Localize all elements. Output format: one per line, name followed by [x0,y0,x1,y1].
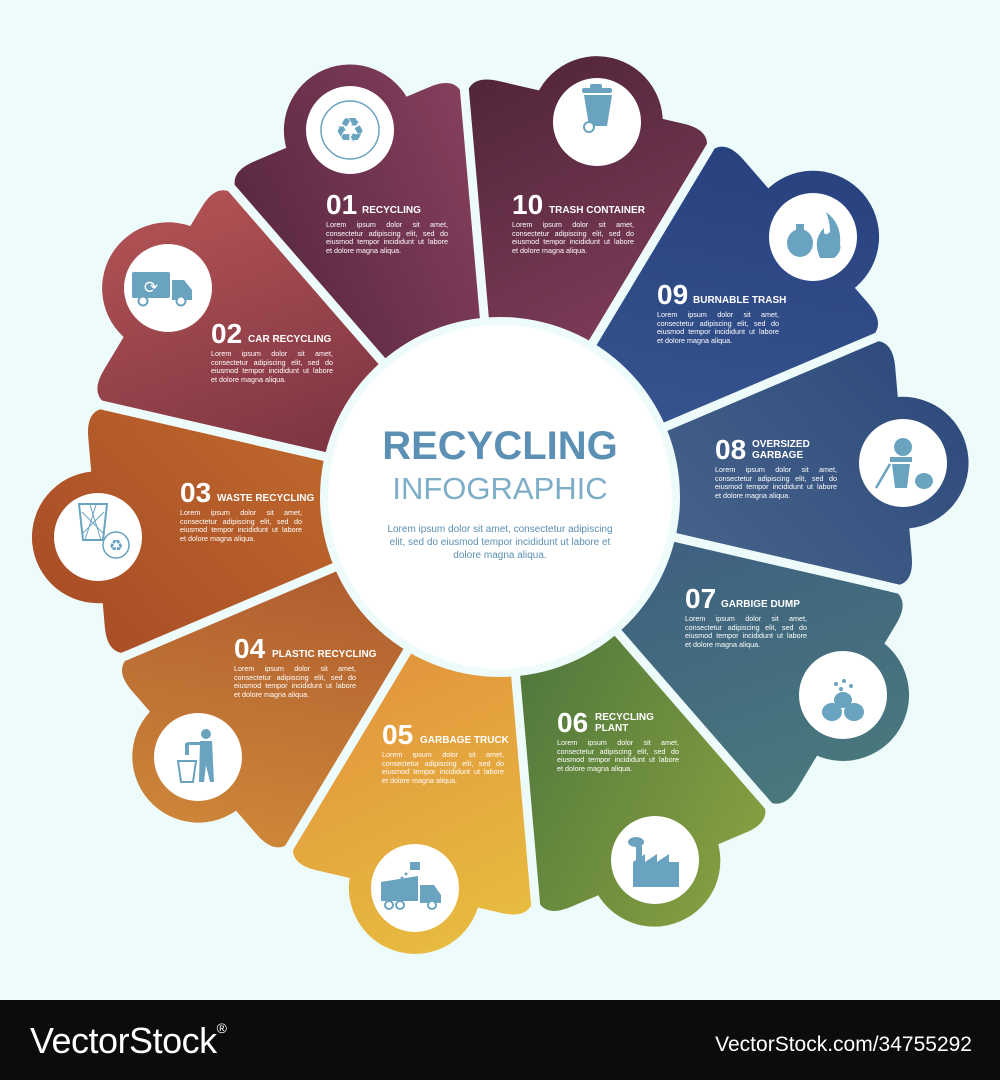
petal 02 [44,156,563,602]
text 04: 04 [234,633,265,664]
text 09: 09 [657,279,688,310]
text 01: consectetur adipiscing elit, sed do [326,229,448,238]
text 04: eiusmod tempor incididunt ut labore [234,681,356,690]
text 07: et dolore magna aliqua. [685,640,760,649]
text 06: Lorem ipsum dolor sit amet, [557,738,679,747]
text 08: et dolore magna aliqua. [715,491,790,500]
petal 08 [489,334,979,619]
text 09 [657,279,786,345]
text 08: Lorem ipsum dolor sit amet, [715,465,837,474]
footer watermark bar [0,1000,1000,1080]
text 03: consectetur adipiscing elit, sed do [180,517,302,526]
text 04 [234,633,376,699]
text 08: OVERSIZED [752,439,810,450]
petal 06 [387,449,793,969]
text 08: 08 [715,434,746,465]
icon 07: garbage dump [799,651,887,739]
text 04: PLASTIC RECYCLING [272,649,376,660]
text 03: eiusmod tempor incididunt ut labore [180,525,302,534]
text 10: 10 [512,189,543,220]
text 02: CAR RECYCLING [248,334,331,345]
text 07 [685,583,807,649]
footer watermark bar: VectorStock.com/34755292 [715,1033,972,1056]
text 10: et dolore magna aliqua. [512,246,587,255]
text 02: eiusmod tempor incididunt ut labore [211,366,333,375]
text 04: consectetur adipiscing elit, sed do [234,673,356,682]
text 01: 01 [326,189,357,220]
text 05: consectetur adipiscing elit, sed do [382,759,504,768]
text 10 [512,189,645,255]
petal 04 [69,404,581,894]
icon 10: trash container [553,78,641,166]
text 07: Lorem ipsum dolor sit amet, [685,614,807,623]
petal 03 [21,375,511,660]
text 04: Lorem ipsum dolor sit amet, [234,664,356,673]
text 05: 05 [382,719,413,750]
text 09: et dolore magna aliqua. [657,336,732,345]
center title: INFOGRAPHIC [392,471,608,506]
text 09: BURNABLE TRASH [693,295,786,306]
petal 05 [275,469,620,979]
text 05 [382,719,509,785]
text 06: eiusmod tempor incididunt ut labore [557,755,679,764]
text 06 [557,707,679,773]
icon 03: waste recycling [54,493,142,581]
icon 01: recycling: ♻ [335,111,365,151]
text 05: et dolore magna aliqua. [382,776,457,785]
text 01: RECYCLING [362,205,421,216]
text 02 [211,318,333,384]
text 10: eiusmod tempor incididunt ut labore [512,237,634,246]
petal 10 [380,28,722,525]
center title: Lorem ipsum dolor sit amet, consectetur adipiscing elit, sed do eiusmod tempor incididunt ut labore et dolore magna aliqua. [387,524,613,561]
text 07: GARBIGE DUMP [721,599,800,610]
icon 02: car recycling [124,244,212,332]
text 01: eiusmod tempor incididunt ut labore [326,237,448,246]
footer watermark bar: VectorStock® [30,1020,226,1061]
text 09: consectetur adipiscing elit, sed do [657,319,779,328]
text 06: consectetur adipiscing elit, sed do [557,747,679,756]
icon 04: plastic recycling [154,713,242,801]
text 08: consectetur adipiscing elit, sed do [715,474,837,483]
text 02: et dolore magna aliqua. [211,375,286,384]
text 03: Lorem ipsum dolor sit amet, [180,508,302,517]
text 07: eiusmod tempor incididunt ut labore [685,631,807,640]
text 03 [180,477,314,543]
text 06: PLANT [595,723,628,734]
text 05: eiusmod tempor incididunt ut labore [382,767,504,776]
text 01 [326,189,448,255]
text 08: eiusmod tempor incididunt ut labore [715,482,837,491]
icon 05: garbage truck [371,844,459,932]
text 02: Lorem ipsum dolor sit amet, [211,349,333,358]
text 03: WASTE RECYCLING [217,493,314,504]
text 06: 06 [557,707,588,738]
text 09: eiusmod tempor incididunt ut labore [657,327,779,336]
icon 02: car recycling: ⟳ [144,278,158,298]
text 06: RECYCLING [595,712,654,723]
center title [382,424,618,561]
text 07: consectetur adipiscing elit, sed do [685,623,807,632]
text 02: 02 [211,318,242,349]
text 05: Lorem ipsum dolor sit amet, [382,750,504,759]
text 07: 07 [685,583,716,614]
text 10: Lorem ipsum dolor sit amet, [512,220,634,229]
text 10: consectetur adipiscing elit, sed do [512,229,634,238]
icon 06: recycling plant [611,816,699,904]
icon 01: recycling [306,86,394,174]
text 03: 03 [180,477,211,508]
petal 09 [419,94,938,590]
petal 07 [437,392,959,840]
icon 08: oversized garbage [859,419,947,507]
text 03: et dolore magna aliqua. [180,534,255,543]
text 01: Lorem ipsum dolor sit amet, [326,220,448,229]
petal 01 [206,24,613,545]
text 05: GARBAGE TRUCK [420,735,509,746]
icon 09: burnable trash [769,193,857,281]
text 09: Lorem ipsum dolor sit amet, [657,310,779,319]
center circle [328,325,672,669]
text 10: TRASH CONTAINER [549,205,645,216]
text 06: et dolore magna aliqua. [557,764,632,773]
center title: RECYCLING [382,424,618,468]
text 04: et dolore magna aliqua. [234,690,309,699]
icon 03: waste recycling: ♻ [109,536,123,555]
text 02: consectetur adipiscing elit, sed do [211,358,333,367]
text 01: et dolore magna aliqua. [326,246,401,255]
text 08 [715,434,837,500]
text 08: GARBAGE [752,450,803,461]
